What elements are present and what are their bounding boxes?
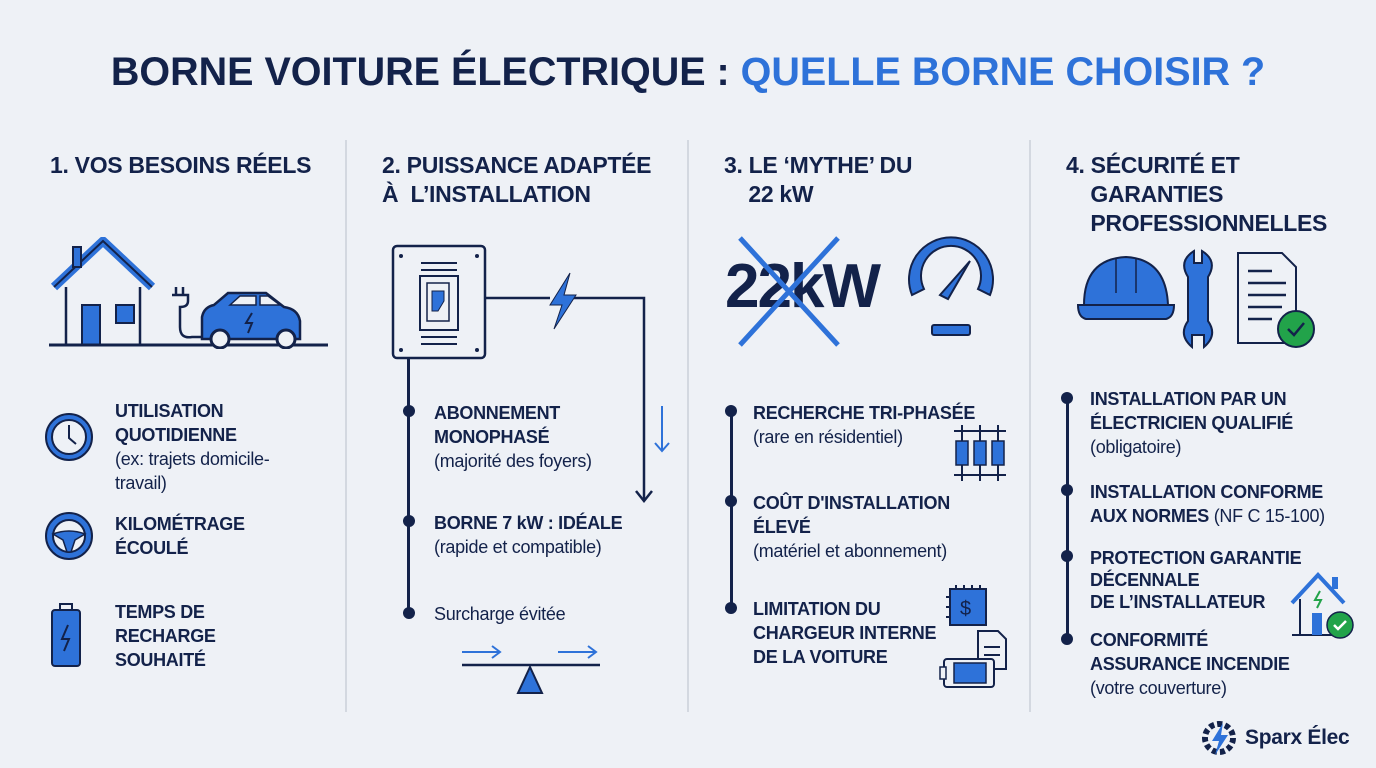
icon: house check xyxy=(1290,572,1354,639)
icon: battery xyxy=(51,603,81,667)
item: kilometrage: ÉCOULÉ xyxy=(115,538,188,558)
item: kilometrage: KILOMÉTRAGE xyxy=(115,514,245,534)
item: surcharge: Surcharge évitée xyxy=(434,604,565,624)
item: utilisation: (ex: trajets domicile- xyxy=(115,449,269,469)
item: abonnement: ABONNEMENT xyxy=(434,403,560,423)
item: limitation: DE LA VOITURE xyxy=(753,647,887,667)
icon: crossed 22kW and gauge: 22kW xyxy=(725,252,881,321)
item: assurance: (votre couverture) xyxy=(1090,678,1227,698)
item: temps: TEMPS DE xyxy=(115,602,205,622)
heading 2 xyxy=(382,152,651,207)
item: utilisation: travail) xyxy=(115,473,167,493)
item: abonnement: (majorité des foyers) xyxy=(434,451,592,471)
title: BORNE VOITURE ÉLECTRIQUE : QUELLE BORNE CHOISIR ? xyxy=(111,50,1265,94)
panel: besoins xyxy=(45,152,328,670)
item: decennale: PROTECTION GARANTIE xyxy=(1090,548,1301,568)
item: decennale: DE L’INSTALLATEUR xyxy=(1090,592,1265,612)
item: limitation xyxy=(725,585,1007,688)
item: tri-phasee: RECHERCHE TRI-PHASÉE xyxy=(753,403,975,423)
item: assurance xyxy=(1061,630,1290,698)
item: abonnement xyxy=(403,403,592,471)
item: utilisation xyxy=(45,401,269,493)
logo: Sparx Élec xyxy=(1245,726,1349,749)
icon: three-phase xyxy=(954,425,1006,481)
item: tri-phasee: (rare en résidentiel) xyxy=(753,427,903,447)
item: borne 7kW: BORNE 7 kW : IDÉALE xyxy=(434,513,622,533)
heading 3: 22 kW xyxy=(748,181,813,207)
heading 1: 1. VOS BESOINS RÉELS xyxy=(50,152,311,178)
heading 3: 3. LE ‘MYTHE’ DU xyxy=(724,152,912,178)
timeline line xyxy=(407,358,410,613)
item: cout: ÉLEVÉ xyxy=(753,517,811,537)
icon: electrical panel with flow xyxy=(392,244,670,503)
item: temps xyxy=(51,602,216,670)
icon: chip and charger: $ xyxy=(960,598,971,620)
panel: mythe 22kW xyxy=(724,152,1007,688)
icon: house and car xyxy=(49,237,328,349)
heading 3 xyxy=(724,152,912,207)
item: borne 7kW: (rapide et compatible) xyxy=(434,537,602,557)
item: kilometrage xyxy=(45,512,245,560)
heading 4 xyxy=(1066,152,1327,236)
item: assurance: ASSURANCE INCENDIE xyxy=(1090,654,1290,674)
heading 4: PROFESSIONNELLES xyxy=(1090,210,1327,236)
item: decennale: DÉCENNALE xyxy=(1090,570,1199,590)
item: electricien: ÉLECTRICIEN QUALIFIÉ xyxy=(1090,413,1293,433)
item: utilisation: UTILISATION xyxy=(115,401,223,421)
timeline line xyxy=(730,410,733,610)
icon: balance xyxy=(462,645,600,694)
icon: crossed 22kW and gauge xyxy=(725,236,994,347)
item: normes: INSTALLATION CONFORME xyxy=(1090,482,1323,502)
logo xyxy=(1202,721,1349,755)
item: utilisation: QUOTIDIENNE xyxy=(115,425,237,445)
item: electricien xyxy=(1061,389,1293,457)
heading 2: À L’INSTALLATION xyxy=(382,181,591,207)
item: tri-phasee xyxy=(725,402,1006,481)
icon: chip and charger xyxy=(939,585,1007,688)
item: limitation: CHARGEUR INTERNE xyxy=(753,623,936,643)
item: electricien: (obligatoire) xyxy=(1090,437,1181,457)
item: limitation: LIMITATION DU xyxy=(753,599,880,619)
icon: steering wheel xyxy=(45,512,93,560)
heading 4: 4. SÉCURITÉ ET xyxy=(1066,152,1239,178)
heading 2: 2. PUISSANCE ADAPTÉE xyxy=(382,152,651,178)
panel: puissance xyxy=(382,152,670,694)
icon: clock xyxy=(45,413,93,461)
item: abonnement: MONOPHASÉ xyxy=(434,427,549,447)
item: temps: RECHARGE xyxy=(115,626,216,646)
item: assurance: CONFORMITÉ xyxy=(1090,630,1208,650)
icon: helmet wrench document xyxy=(1077,249,1315,350)
item: normes: AUX NORMES (NF C 15-100) xyxy=(1090,506,1325,526)
item: electricien: INSTALLATION PAR UN xyxy=(1090,389,1286,409)
item: cout xyxy=(725,492,950,561)
panel: securite xyxy=(1061,152,1354,698)
item: cout: (matériel et abonnement) xyxy=(753,541,947,561)
item: temps: SOUHAITÉ xyxy=(115,650,206,670)
item: decennale xyxy=(1061,548,1354,639)
timeline line xyxy=(1066,395,1069,640)
icon: gear bolt xyxy=(1202,721,1236,755)
item: borne 7kW xyxy=(403,512,622,557)
item: normes xyxy=(1061,482,1325,526)
heading 4: GARANTIES xyxy=(1090,181,1223,207)
item: cout: COÛT D'INSTALLATION xyxy=(753,493,950,513)
